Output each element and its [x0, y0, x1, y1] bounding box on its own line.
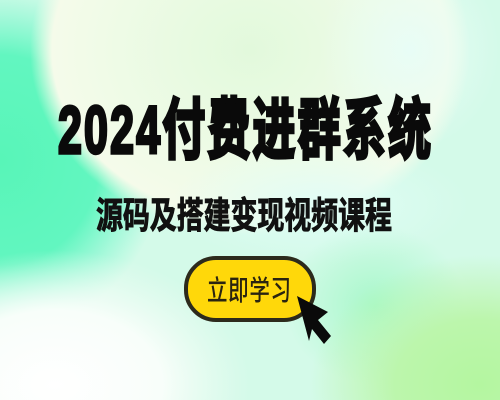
icon: mouse cursor arrow: [297, 296, 331, 344]
subtitle: 源码及搭建变现视频课程: [96, 195, 392, 236]
button: start learning: [186, 258, 314, 320]
title: 2024付费进群系统: [58, 92, 431, 167]
button label: 立即学习: [207, 276, 291, 307]
